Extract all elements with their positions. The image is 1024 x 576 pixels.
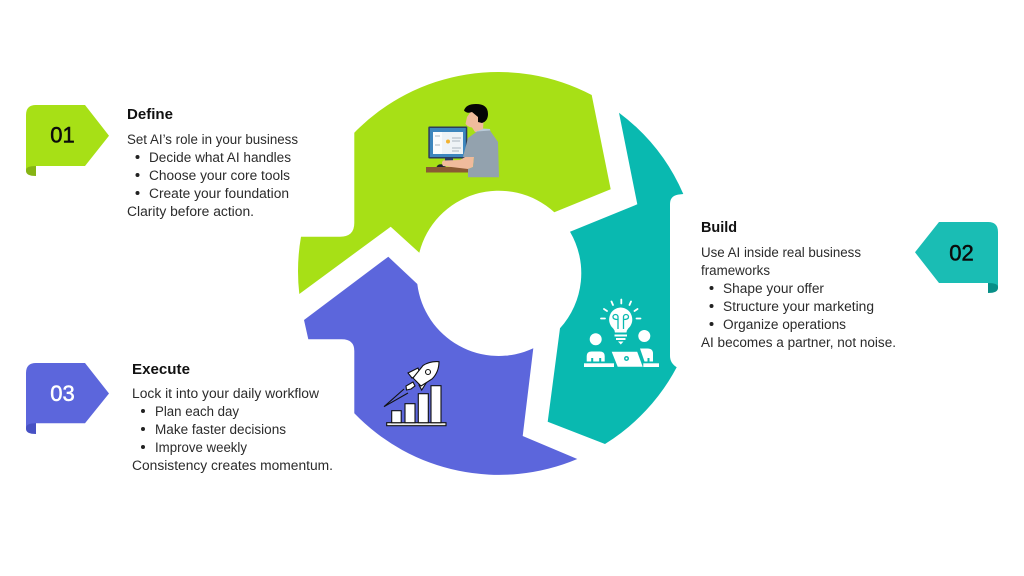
description: build: Shape your offer (723, 281, 825, 296)
badge: 01: 01 (50, 122, 75, 148)
description: execute: Make faster decisions (155, 422, 286, 437)
cycle segment: execute (purple) (304, 257, 577, 475)
description: execute: Improve weekly (155, 440, 247, 455)
description: define (127, 132, 298, 219)
description: build (701, 245, 896, 350)
cycle segment: define (green) (298, 72, 611, 294)
badge: 03 (26, 363, 109, 434)
description: build: Organize operations (723, 317, 846, 332)
description: build: frameworks (701, 263, 770, 278)
icon: rocket over rising bar chart (384, 362, 446, 426)
icon: person at computer (426, 104, 499, 177)
description: build: Use AI inside real business (701, 245, 861, 260)
description: execute: Lock it into your daily workflow (132, 386, 319, 401)
badge: 02: 02 (949, 240, 974, 266)
description: define: Set AI’s role in your business (127, 132, 298, 147)
heading: execute: Execute (132, 361, 190, 378)
description: define: Choose your core tools (149, 168, 290, 183)
heading: build: Build (701, 219, 737, 236)
cycle segment: build (teal) (548, 113, 683, 444)
description: execute: Consistency creates momentum. (132, 458, 333, 473)
description: build: Structure your marketing (723, 299, 874, 314)
description: define: Decide what AI handles (149, 150, 291, 165)
badge: 01 (26, 105, 109, 176)
badge: 02 (915, 222, 998, 293)
icon: team with lightbulb idea (584, 300, 659, 367)
description: define: Clarity before action. (127, 204, 254, 219)
badge: 03: 03 (50, 381, 75, 406)
text block: execute (132, 361, 333, 473)
description: execute (132, 386, 333, 473)
description: execute: Plan each day (155, 404, 239, 419)
description: build: AI becomes a partner, not noise. (701, 335, 896, 350)
text block: define (127, 106, 298, 219)
text block: build (701, 219, 896, 350)
heading: define: Define (127, 106, 173, 123)
description: define: Create your foundation (149, 186, 289, 201)
